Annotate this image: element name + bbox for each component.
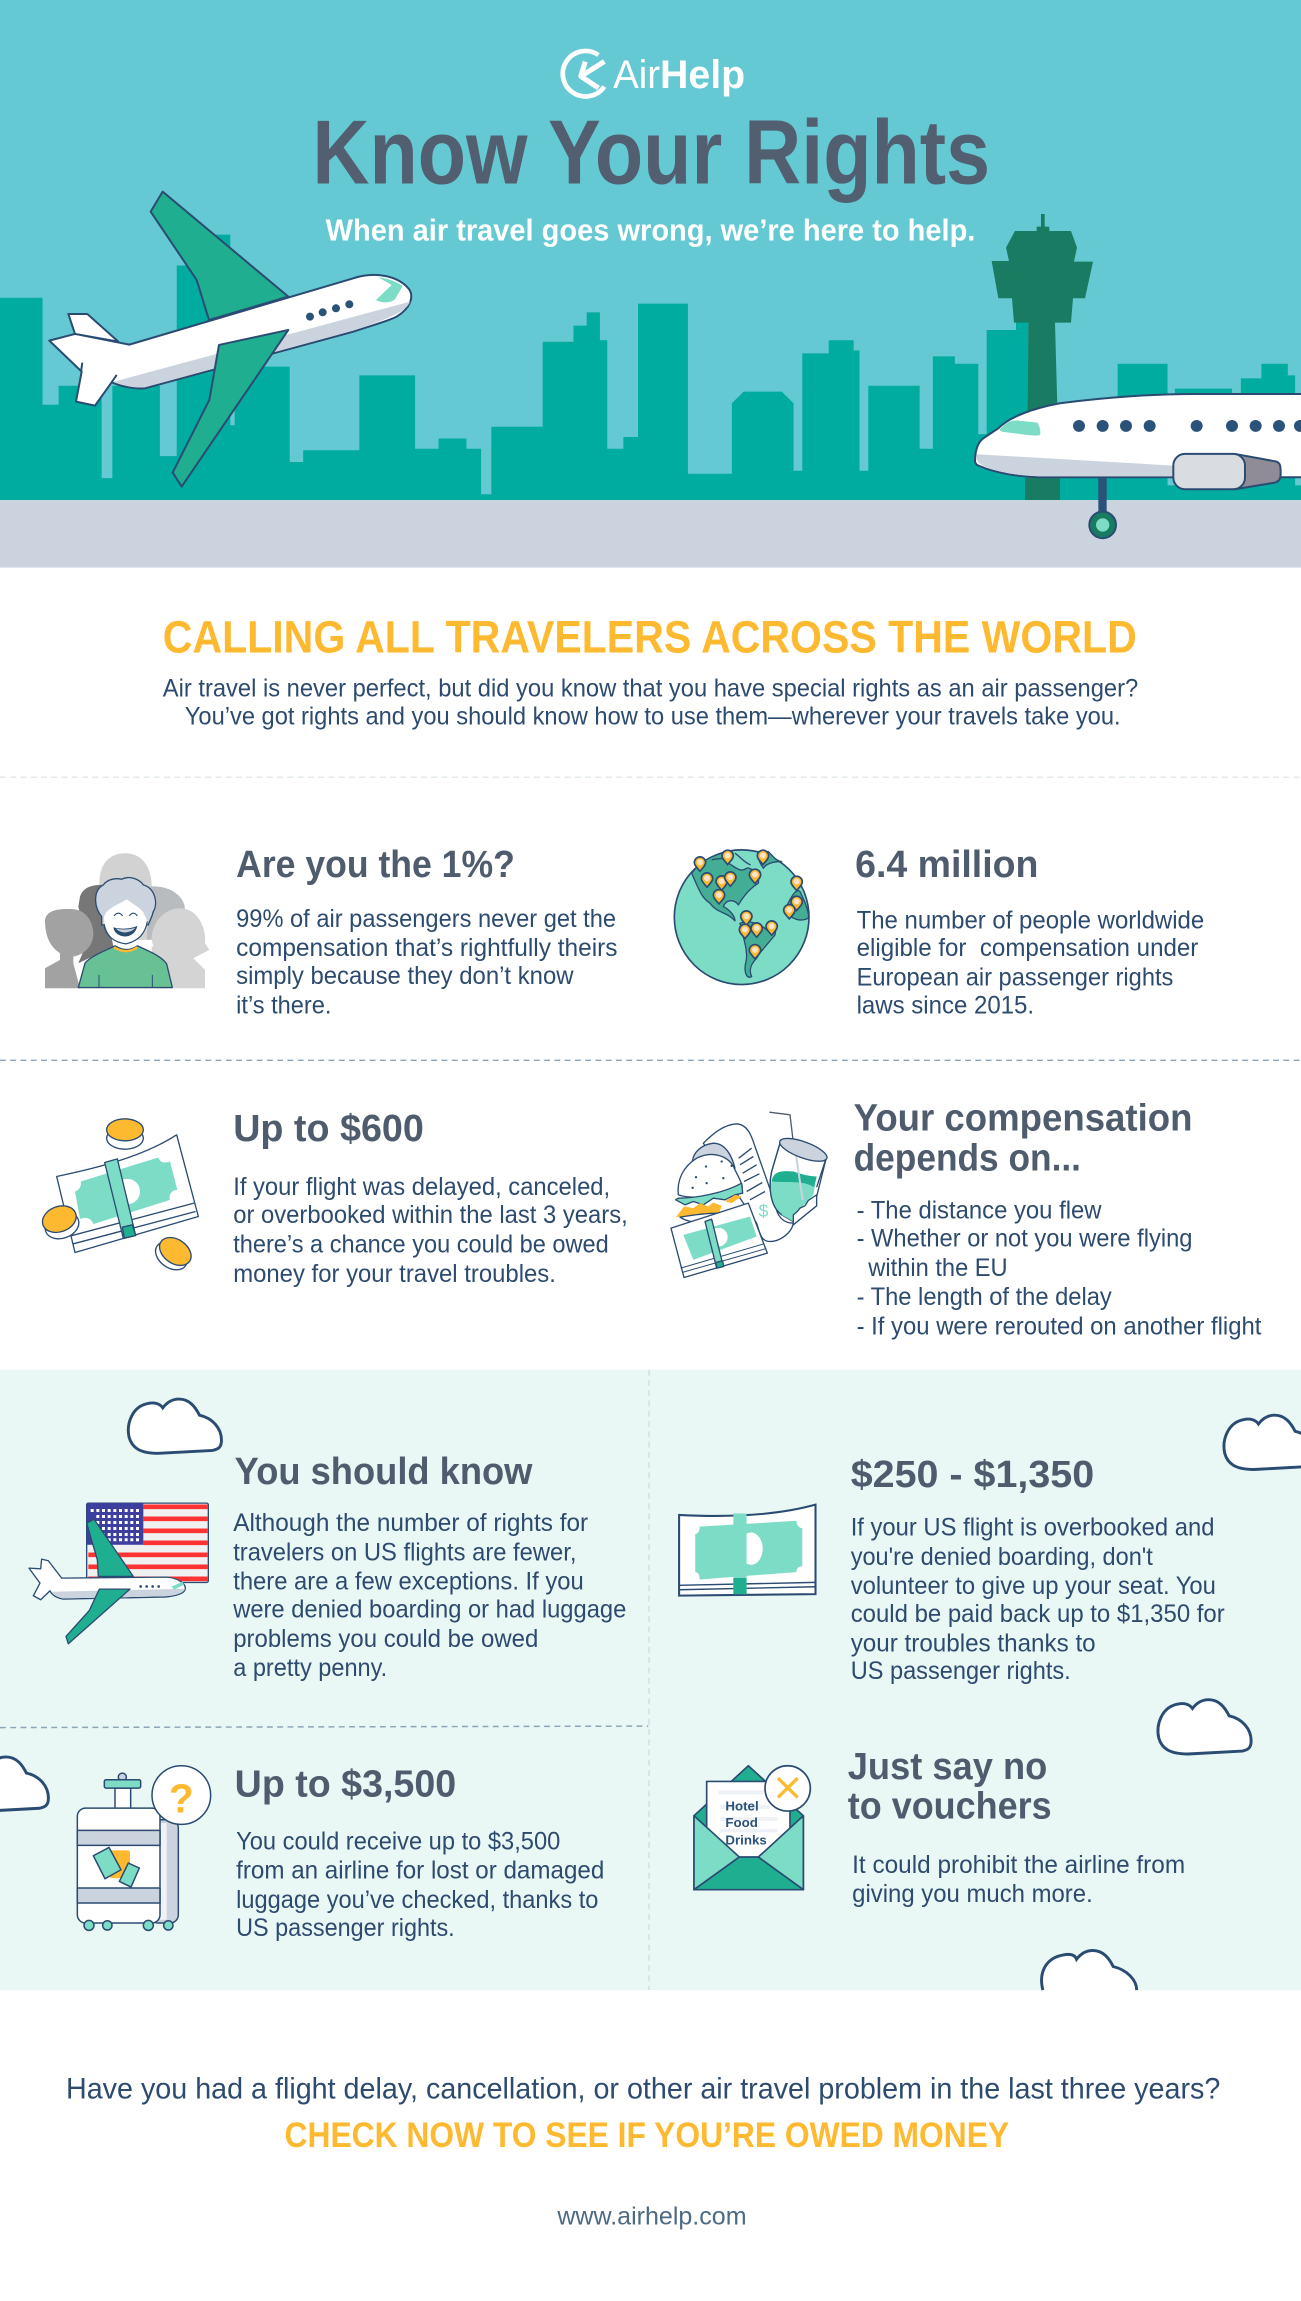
body text: there’s a chance you could be owed	[233, 1230, 609, 1258]
question text: Have you had a flight delay, cancellation, or other air travel problem in the last three years?	[66, 2073, 1220, 2106]
heading: Just say no	[848, 1745, 1047, 1788]
heading: Up to $3,500	[235, 1763, 456, 1806]
body text: luggage you’ve checked, thanks to	[236, 1886, 598, 1914]
panel: just say no to vouchers: to vouchers	[848, 1785, 1052, 1828]
panel: intro: You’ve got rights and you should know how to use them—wherever your travels take you.	[185, 702, 1121, 730]
panel: your compensation: depends on...	[854, 1136, 1081, 1179]
panel: up to $3,500	[77, 1763, 604, 1942]
icon: AirHelp logo: Air	[613, 53, 660, 97]
body text: You could receive up to $3,500	[236, 1827, 560, 1855]
icon: suitcase with question mark	[77, 1766, 211, 1930]
panel: footer call to action	[66, 2073, 1220, 2231]
body text: there are a few exceptions. If you	[233, 1568, 584, 1596]
list: - The distance you flew	[857, 1197, 1102, 1225]
body text: If your flight was delayed, canceled,	[233, 1173, 610, 1201]
body text: money for your travel troubles.	[233, 1260, 556, 1288]
icon: parked plane	[975, 394, 1301, 538]
body text: from an airline for lost or damaged	[236, 1857, 604, 1885]
body text: US passenger rights.	[851, 1657, 1071, 1685]
body text: giving you much more.	[852, 1880, 1093, 1908]
body text: travelers on US flights are fewer,	[233, 1538, 576, 1566]
body text: it’s there.	[236, 991, 331, 1019]
body text	[232, 1509, 626, 1682]
body text: simply because they don’t know	[236, 962, 574, 990]
icon: cash and coins	[39, 1119, 198, 1276]
body text: US passenger rights.	[236, 1914, 455, 1942]
body text: a pretty penny.	[233, 1654, 387, 1682]
body text	[851, 1513, 1225, 1685]
icon: envelope with voucher: Hotel	[725, 1798, 759, 1813]
list: - Whether or not you were flying	[857, 1225, 1192, 1253]
body text: laws since 2015.	[857, 991, 1034, 1019]
body text: compensation that’s rightfully theirs	[236, 934, 617, 962]
body text	[857, 906, 1204, 1019]
title: Know Your Rights	[312, 102, 990, 203]
body text: or overbooked within the last 3 years,	[233, 1201, 628, 1229]
panel: you should know	[29, 1450, 626, 1682]
intro text: Air travel is never perfect, but did you know that you have special rights as an air passenger?	[163, 675, 1138, 703]
call to action: CHECK NOW TO SEE IF YOU’RE OWED MONEY	[285, 2116, 1009, 2155]
panel: are you the 1%	[45, 843, 617, 1019]
subtitle: When air travel goes wrong, we’re here to help.	[326, 213, 975, 248]
panel: $250 - $1,350	[679, 1453, 1225, 1685]
heading: You should know	[235, 1450, 533, 1493]
heading: Are you the 1%?	[236, 843, 515, 886]
control tower	[992, 214, 1093, 500]
list: - If you were rerouted on another flight	[857, 1313, 1261, 1341]
body text: Although the number of rights for	[233, 1509, 588, 1537]
icon: AirHelp logo: Help	[660, 53, 745, 97]
icon: suitcase with question mark: ?	[169, 1775, 194, 1821]
body text: could be paid back up to $1,350 for	[851, 1600, 1225, 1628]
icon: AirHelp logo	[563, 51, 745, 97]
icon: envelope with voucher	[694, 1766, 810, 1890]
body text	[233, 1173, 628, 1288]
icon: envelope with voucher: Food	[725, 1815, 758, 1830]
body text: European air passenger rights	[857, 964, 1173, 992]
website url: www.airhelp.com	[556, 2203, 747, 2231]
panel: just say no to vouchers	[694, 1745, 1185, 1908]
heading: CALLING ALL TRAVELERS ACROSS THE WORLD	[163, 612, 1137, 663]
body text	[236, 905, 617, 1019]
panel: pale section background	[0, 1370, 1301, 1990]
heading: Your compensation	[854, 1097, 1192, 1140]
body text: you're denied boarding, don't	[851, 1543, 1153, 1571]
body text: were denied boarding or had luggage	[232, 1596, 626, 1624]
body text: eligible for compensation under	[857, 934, 1198, 962]
body text	[852, 1851, 1185, 1908]
body text: your troubles thanks to	[851, 1629, 1096, 1657]
panel: up to $600	[39, 1107, 628, 1288]
body text: volunteer to give up your seat. You	[851, 1572, 1216, 1600]
body text: 99% of air passengers never get the	[236, 905, 616, 933]
icon: US flag and plane	[29, 1503, 208, 1644]
icon: clouds	[0, 1399, 1301, 1990]
city skyline	[0, 235, 1301, 500]
icon: globe with pins	[674, 850, 809, 985]
icon: receipt, burger, drink and cash: $	[759, 1201, 769, 1221]
body text	[236, 1827, 604, 1942]
icon: receipt, burger, drink and cash	[671, 1112, 830, 1277]
panel: intro	[163, 612, 1138, 730]
body text: It could prohibit the airline from	[852, 1851, 1185, 1879]
heading: $250 - $1,350	[851, 1453, 1094, 1496]
body text: The number of people worldwide	[857, 906, 1204, 934]
list: within the EU	[867, 1254, 1008, 1282]
icon: crowd with smiling person	[45, 853, 209, 988]
icon: banknote stack	[679, 1505, 816, 1596]
list	[857, 1197, 1261, 1341]
heading: Up to $600	[233, 1107, 424, 1150]
panel: hero header	[0, 0, 1301, 568]
panel: your compensation	[671, 1097, 1261, 1341]
list: - The length of the delay	[857, 1283, 1112, 1311]
runway	[0, 500, 1301, 568]
heading: 6.4 million	[855, 843, 1038, 886]
icon: plane taking off	[49, 192, 411, 487]
body text: If your US flight is overbooked and	[851, 1513, 1214, 1541]
icon: envelope with voucher: Drinks	[725, 1833, 767, 1848]
panel: 6.4 million	[674, 843, 1204, 1019]
body text: problems you could be owed	[233, 1625, 538, 1653]
